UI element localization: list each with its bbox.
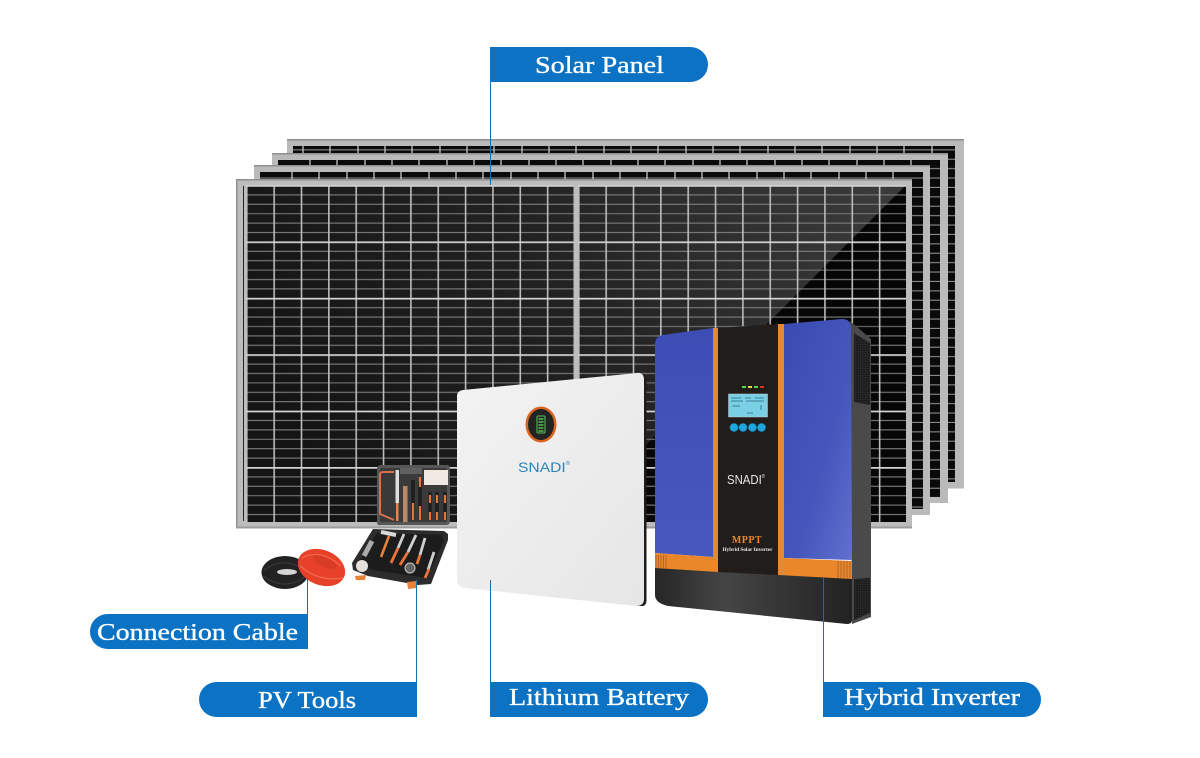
battery SNADI logo: ®: [566, 460, 570, 467]
PV tools case: [352, 465, 450, 589]
battery indicator: [526, 406, 556, 442]
label: Connection Cable: [90, 614, 308, 649]
battery SNADI logo: SNADI: [518, 460, 559, 475]
inverter base: [655, 566, 852, 624]
inverter side: [850, 321, 871, 624]
inverter orange trim: [655, 324, 852, 579]
label: Hybrid Inverter: [823, 682, 1041, 717]
hybrid inverter: [655, 319, 871, 624]
leader line: solar panel: [490, 47, 492, 185]
label: Lithium Battery: [490, 682, 708, 717]
inverter right blue panel: [784, 319, 852, 560]
solar panel array: [236, 139, 964, 528]
leader line: PV tools: [416, 580, 418, 717]
MPPT text: MPPT: [732, 535, 762, 546]
back solar panel 2: [254, 165, 930, 515]
label: Solar Panel: Solar Panel: [535, 52, 664, 79]
leader line: lithium battery: [490, 580, 492, 717]
back solar panel 4: [287, 139, 964, 488]
Hybrid Solar Inverter text: Hybrid Solar Inverter: [723, 547, 773, 553]
leader line: connection cable: [306, 578, 308, 649]
label: Connection Cable: Connection Cable: [97, 619, 298, 646]
inverter SNADI logo: ®: [762, 473, 765, 480]
battery dark edge: [636, 373, 646, 606]
battery body: [457, 373, 644, 606]
tool case base: [352, 529, 448, 589]
connection cable coils: [262, 542, 351, 593]
label: Lithium Battery: Lithium Battery: [509, 684, 690, 711]
label: Solar Panel: [490, 47, 708, 82]
red cable coil: [292, 542, 351, 593]
black cable coil: [262, 556, 308, 589]
status LEDs: [742, 386, 764, 388]
front solar panel: [236, 179, 912, 528]
LCD display: [728, 394, 768, 417]
leader line: hybrid inverter: [822, 578, 824, 717]
control buttons: [730, 423, 766, 432]
label: PV Tools: [199, 682, 417, 717]
tool case lid: [377, 465, 450, 525]
inverter centre black panel: [718, 324, 778, 575]
label: Hybrid Inverter: Hybrid Inverter: [844, 684, 1020, 711]
inverter left blue panel: [655, 328, 713, 557]
label: PV Tools: PV Tools: [258, 687, 356, 714]
inverter SNADI logo: SNADI: [727, 472, 767, 487]
lithium battery: [457, 373, 646, 606]
back solar panel 3: [272, 153, 948, 503]
